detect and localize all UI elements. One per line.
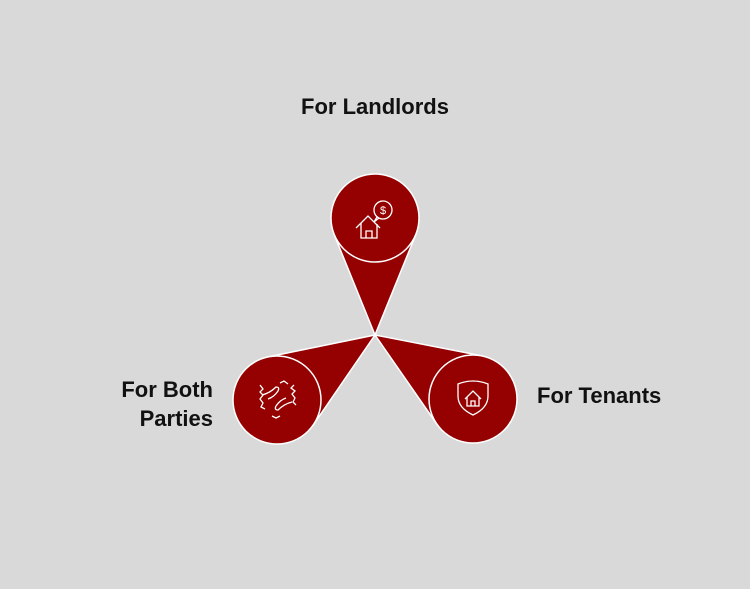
label: For Both Parties: For Both	[121, 377, 213, 402]
icon: handshake	[260, 381, 296, 418]
icon: house with dollar: $	[380, 205, 386, 217]
icon: shield with house	[458, 381, 488, 415]
circle: both parties	[233, 356, 321, 444]
label: For Tenants: For Tenants	[537, 383, 661, 408]
circle: tenants	[429, 355, 517, 443]
title: For Landlords: For Landlords	[301, 94, 449, 119]
wedge: tenants	[375, 335, 482, 424]
wedge: both parties	[268, 335, 375, 425]
wedge: landlords	[334, 235, 416, 335]
circle: landlords	[331, 174, 419, 262]
label: For Both Parties: Parties	[140, 406, 213, 431]
label: For Both Parties	[121, 377, 213, 431]
